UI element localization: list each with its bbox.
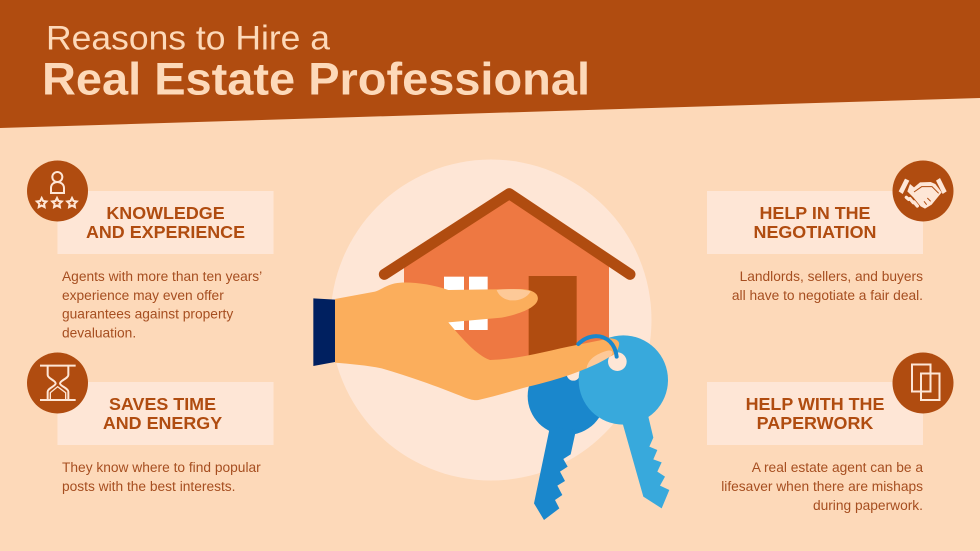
header banner (0, 0, 980, 128)
body text: They know where to find popular (62, 460, 261, 475)
heading card: PAPERWORK (757, 413, 873, 433)
hand (335, 282, 619, 400)
heading card: HELP IN THE (759, 203, 871, 223)
panel: help in the negotiation (707, 160, 954, 303)
light blue key (579, 335, 669, 508)
heading card: AND ENERGY (103, 413, 222, 433)
heading card (58, 191, 274, 254)
heading card: HELP WITH THE (746, 394, 884, 414)
body text: Agents with more than ten years’ (62, 269, 262, 284)
body text: posts with the best interests. (62, 479, 236, 494)
shirt cuff (313, 298, 335, 366)
title: Real Estate Professional (42, 54, 590, 104)
heading card (58, 382, 274, 445)
heading card: AND EXPERIENCE (86, 222, 245, 242)
title (42, 20, 590, 104)
fingernails (497, 289, 531, 300)
door (529, 276, 577, 358)
panel: knowledge and experience (27, 160, 274, 340)
body text: experience may even offer (62, 288, 224, 303)
body text: guarantees against property (62, 306, 233, 322)
icon: documents (892, 352, 954, 414)
heading card: KNOWLEDGE (106, 203, 225, 223)
background circle (330, 160, 652, 480)
panel: help with the paperwork (707, 352, 954, 513)
key ring (578, 336, 617, 357)
dark blue key (528, 357, 606, 520)
roof (384, 194, 630, 274)
body text: all have to negotiate a fair deal. (732, 288, 923, 303)
body text: lifesaver when there are mishaps (721, 479, 923, 494)
icon: agent with stars (27, 160, 88, 222)
icon: handshake (892, 160, 954, 222)
body text: Landlords, sellers, and buyers (740, 269, 923, 284)
body text: devaluation. (62, 326, 136, 340)
heading card: NEGOTIATION (754, 222, 876, 242)
house body (404, 197, 609, 360)
windows (444, 277, 488, 330)
body text: A real estate agent can be a (752, 460, 923, 475)
heading card (707, 382, 923, 445)
panel: saves time and energy (27, 352, 274, 494)
heading card: SAVES TIME (109, 394, 216, 414)
central illustration: house, hand and keys (313, 160, 669, 520)
heading card (707, 191, 923, 254)
title: Reasons to Hire a (46, 20, 330, 58)
body text: during paperwork. (813, 498, 923, 513)
icon: hourglass (27, 352, 88, 414)
